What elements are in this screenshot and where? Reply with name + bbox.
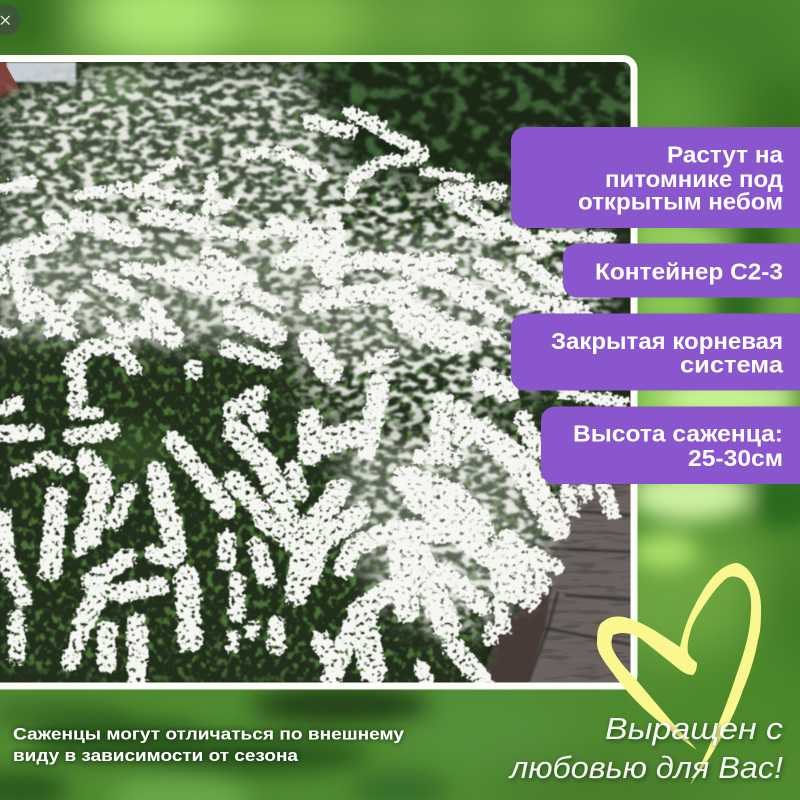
label: seedling height: Высота саженца: [573,420,783,446]
close button [0,4,20,36]
note: appearance may vary by season: Саженцы могут отличаться по внешнему [13,724,405,744]
label: closed root system: система [680,352,783,378]
label: grown in open-air nursery: питомнике под [605,166,783,192]
label: container size: Контейнер С2-3 [595,258,783,284]
hazy white blossom mass [0,66,610,640]
note: appearance may vary by season: виду в зависимости от сезона [13,746,299,765]
background trees [300,62,632,197]
label: seedling height [541,406,800,484]
green foliage [0,62,610,684]
slogan: grown with love for you: любовью для Вас! [508,750,783,785]
white photo frame [0,58,634,686]
white flower sprays [0,112,623,680]
slogan: grown with love for you [508,711,784,785]
sky and brick house [0,62,76,100]
label: grown in open-air nursery: Растут на [667,142,783,168]
label: closed root system: Закрытая корневая [551,328,783,354]
label: grown in open-air nursery [511,127,800,228]
label: grown in open-air nursery: открытым небом [578,188,783,214]
photo: flowering spirea shrub [0,62,632,684]
paving stones and soil [480,484,632,684]
note: appearance may vary by season [13,724,405,765]
icon: hand-drawn yellow heart [597,563,761,785]
label: container size [563,244,800,298]
slogan: grown with love for you: Выращен с [605,711,784,746]
label: seedling height: 25-30см [688,445,783,471]
label: closed root system [511,314,800,390]
